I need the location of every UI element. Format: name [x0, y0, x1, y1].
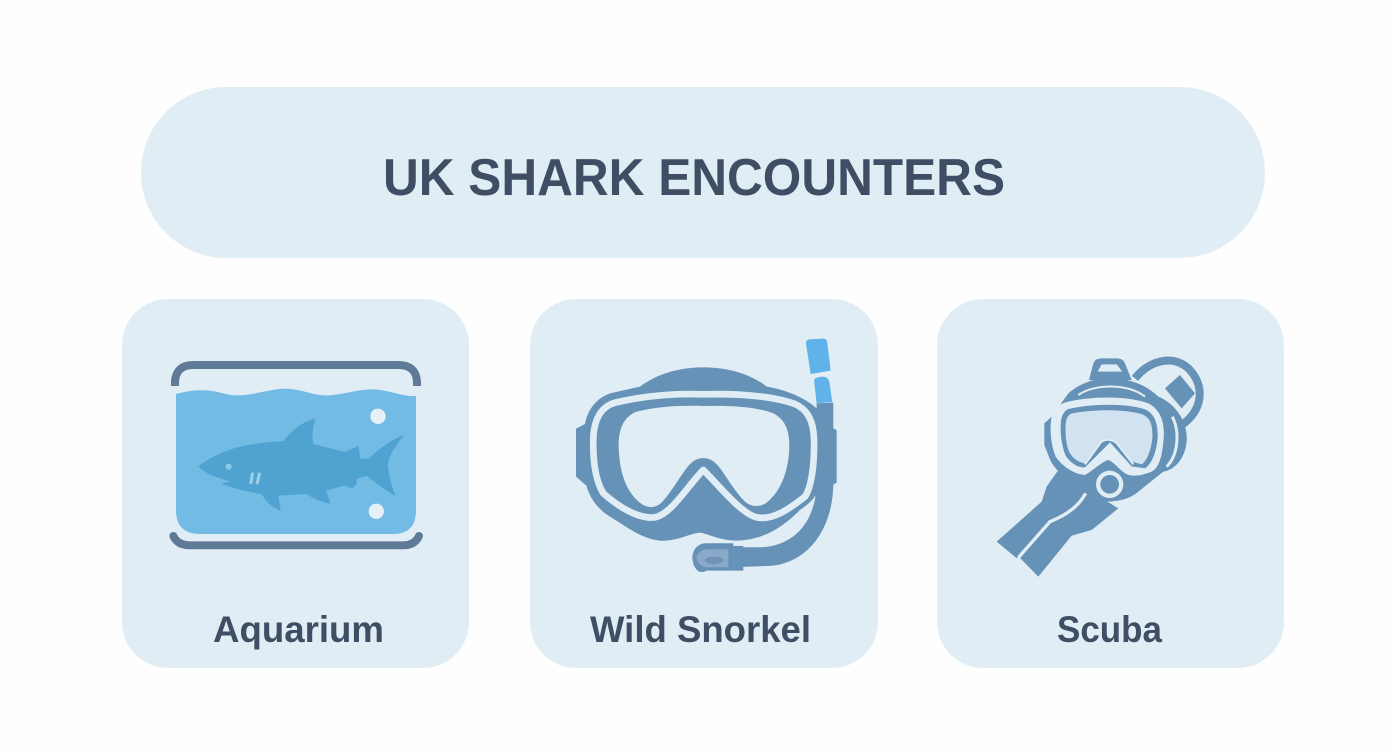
- water: [176, 389, 416, 534]
- nose pale stripe: [1085, 440, 1133, 464]
- mask white ring: [593, 394, 814, 518]
- title: UK SHARK ENCOUNTERS: [383, 149, 1005, 207]
- fin divider: [1018, 493, 1086, 558]
- icon: aquarium tank with shark: [173, 365, 419, 545]
- mouthpiece: [692, 543, 743, 572]
- icon: snorkel mask: [576, 339, 837, 572]
- mask white frame: [1051, 397, 1164, 476]
- panel: scuba: [937, 299, 1284, 668]
- helmet pale arc: [1078, 386, 1145, 397]
- tank strap: [1165, 375, 1195, 408]
- tank top rim: [175, 365, 417, 386]
- shark: [198, 418, 404, 511]
- icon: scuba mask and regulator: [997, 358, 1200, 577]
- label: Wild Snorkel: [590, 609, 811, 650]
- panel: aquarium: [122, 299, 469, 668]
- title banner: [141, 87, 1265, 258]
- tank bottom rim: [173, 536, 419, 545]
- hose fins: [997, 471, 1118, 577]
- mask inner frame: [1061, 405, 1158, 468]
- panel: wild snorkel: [530, 299, 878, 668]
- side highlight: [1167, 417, 1177, 467]
- regulator: [1092, 467, 1127, 502]
- mask outer: [585, 367, 820, 541]
- mask strap buckle: [576, 424, 586, 485]
- air hose loop: [1135, 361, 1200, 425]
- bubbles: [370, 409, 386, 424]
- top handle: [1089, 358, 1132, 380]
- shark gills: [251, 474, 259, 483]
- label: Scuba: [1057, 609, 1162, 650]
- snorkel tip: [806, 339, 831, 374]
- mask lens: [619, 406, 789, 507]
- label: Aquarium: [213, 609, 384, 650]
- snorkel tube: [733, 403, 837, 567]
- shark eye: [226, 464, 232, 470]
- mask lens: [1065, 410, 1152, 464]
- helmet body: [1044, 378, 1187, 501]
